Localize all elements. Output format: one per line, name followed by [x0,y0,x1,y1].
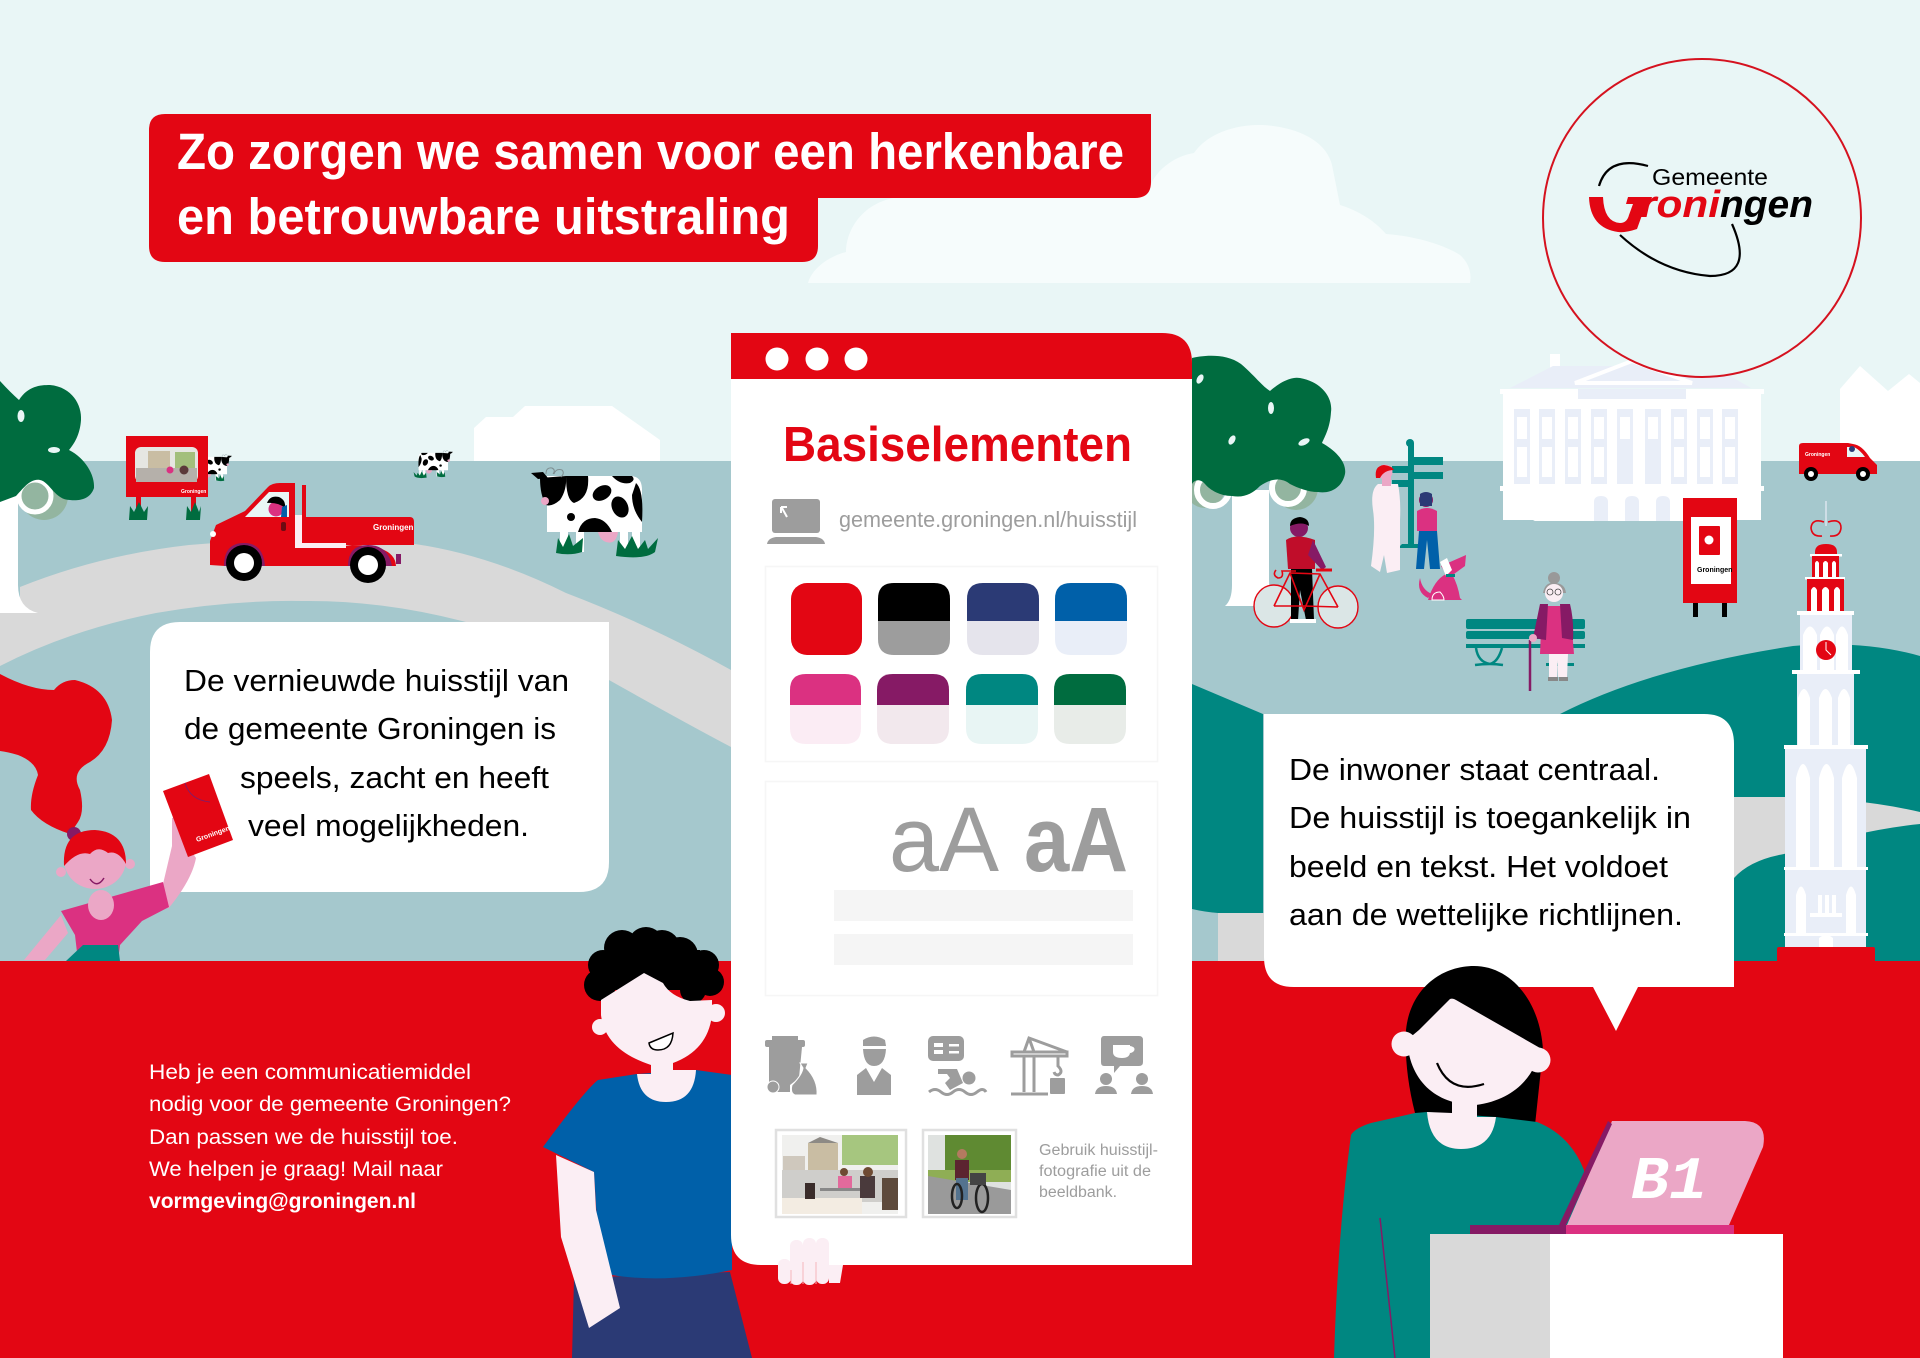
photo caption [1039,1142,1158,1201]
left bubble text [184,663,569,843]
logo wordmark: Gemeente [1652,164,1768,190]
man's smile [649,1033,673,1050]
farm building [474,406,660,461]
laptop [1470,1121,1764,1234]
right bubble text: De huisstijl is toegankelijk in [1289,800,1691,835]
red information kiosk: Groningen [1697,567,1732,574]
right bubble text: aan de wettelijke richtlijnen. [1289,897,1683,932]
photo: cyclist [923,1130,1016,1217]
central browser panel: man's body behind [543,927,752,1358]
central panel [731,333,1192,1265]
window dots [766,348,868,370]
woman's smile [1437,1063,1484,1087]
small cow behind billboard [193,454,232,482]
right tree [1185,356,1345,606]
red van: Groningen [1805,452,1830,458]
right hills [1192,644,1920,961]
right speech bubble [1264,714,1734,1031]
child [1416,492,1440,569]
pink dog [1419,555,1466,600]
photo caption: beeldbank. [1039,1184,1117,1201]
red information kiosk [1683,498,1737,617]
contact text on red band: vormgeving@groningen.nl [149,1189,416,1213]
left tree [0,381,94,613]
small cow in the field [414,450,453,478]
town hall building [1500,354,1764,521]
contact text on red band [149,1060,511,1213]
icon: waste bin and bag [765,1036,817,1095]
icon: laptop [767,499,825,544]
cloud [808,125,1471,283]
title text [177,123,1124,245]
red band [0,961,1920,1358]
title text: en betrouwbare uitstraling [177,188,790,245]
right bubble text: De inwoner staat centraal. [1289,752,1660,787]
left road [0,540,731,747]
billboard with photo: Groningen [181,489,206,495]
icon: construction crane [1011,1038,1067,1094]
typography panel: aA [1024,789,1128,891]
Martini tower [1777,501,1875,963]
contact text on red band: We helpen je graag! Mail naar [149,1157,443,1181]
contact text on red band: nodig voor de gemeente Groningen? [149,1092,511,1116]
laptop label B1: B1 [1631,1149,1707,1217]
red pickup truck [210,483,414,583]
photo caption: Gebruik huisstijl- [1039,1142,1158,1159]
logo circle Gemeente Groningen: ngen [1720,184,1813,226]
cyclist with red bike [1254,517,1358,628]
left bubble text: speels, zacht en heeft [240,760,549,795]
left bubble text: de gemeente Groningen is [184,711,556,746]
woman with laptop [1334,966,1783,1358]
person in white [1371,464,1400,573]
typography panel: aA [889,789,1000,891]
right bubble text: beeld en tekst. Het voldoet [1289,849,1668,884]
woman's face [1407,999,1540,1105]
right bubble text [1289,752,1691,932]
signpost [1392,439,1443,548]
man's hand holding the panel [778,1238,843,1285]
title text: Zo zorgen we samen voor een herkenbare [177,123,1124,180]
girl with red hair holding a brochure: Groningen [195,825,231,844]
ground [0,461,1920,961]
left bubble text: veel mogelijkheden. [248,808,529,843]
left bubble text: De vernieuwde huisstijl van [184,663,569,698]
panel heading: Basiselementen [783,418,1132,472]
icon: civil servant with chain [857,1036,891,1095]
contact text on red band: Dan passen we de huisstijl toe. [149,1125,458,1149]
red van [1799,443,1877,481]
right background houses [1840,366,1920,461]
colour palette panel [766,566,1158,762]
icon: swimming and id card [928,1036,986,1094]
large cow [531,468,658,557]
girl with red hair holding a brochure [0,674,233,961]
man's hair [584,927,724,1003]
title banner [149,114,1151,262]
billboard with photo [126,436,208,520]
desk [1430,1234,1783,1358]
website url: gemeente.groningen.nl/huisstijl [839,507,1137,532]
bench with older woman [1466,572,1585,691]
logo circle Gemeente Groningen [1543,59,1861,377]
photo caption: fotografie uit de [1039,1163,1151,1180]
logo circle Gemeente Groningen: roni [1640,184,1722,226]
typography panel [766,782,1158,996]
man's face [601,973,712,1065]
contact text on red band: Heb je een communicatiemiddel [149,1060,471,1084]
red pickup truck: Groningen [373,523,414,532]
icon: meeting with coffee bubble [1095,1036,1153,1094]
left speech bubble [150,622,609,892]
photo: terrace at city hall [776,1130,906,1217]
